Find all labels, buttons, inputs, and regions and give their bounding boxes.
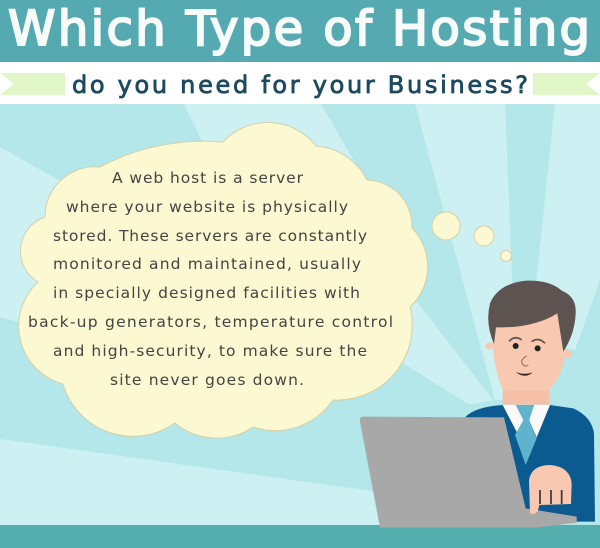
right ribbon — [533, 73, 600, 95]
cloud paragraph: site never goes down. — [110, 371, 304, 389]
face — [493, 307, 565, 391]
laptop — [360, 417, 577, 528]
man at laptop — [360, 281, 595, 528]
background with sun rays — [0, 104, 600, 525]
thought bubbles — [432, 212, 512, 262]
cloud paragraph: monitored and maintained, usually — [53, 255, 361, 273]
subtitle text: do you need for your Business? — [72, 71, 528, 99]
cloud paragraph — [28, 169, 393, 389]
cloud paragraph: A web host is a server — [112, 169, 304, 187]
eyes and brows — [509, 338, 545, 376]
cloud paragraph: where your website is physically — [66, 198, 348, 216]
hair — [488, 281, 576, 352]
hand — [529, 465, 572, 514]
ears — [486, 342, 493, 350]
neck — [503, 377, 549, 405]
cloud paragraph: in specially designed facilities with — [53, 284, 360, 302]
title text: Which Type of Hosting — [8, 1, 590, 57]
cloud paragraph: and high-security, to make sure the — [53, 342, 367, 360]
left ribbon — [0, 73, 65, 95]
title banner — [0, 0, 600, 62]
subtitle band — [0, 62, 600, 104]
tie — [515, 405, 537, 465]
mouth — [516, 372, 533, 376]
collar — [503, 405, 550, 437]
cloud paragraph: stored. These servers are constantly — [53, 227, 367, 245]
cloud paragraph: back-up generators, temperature control — [28, 313, 393, 331]
suit — [465, 405, 595, 522]
thought cloud — [19, 122, 428, 438]
bottom teal band — [0, 525, 600, 548]
